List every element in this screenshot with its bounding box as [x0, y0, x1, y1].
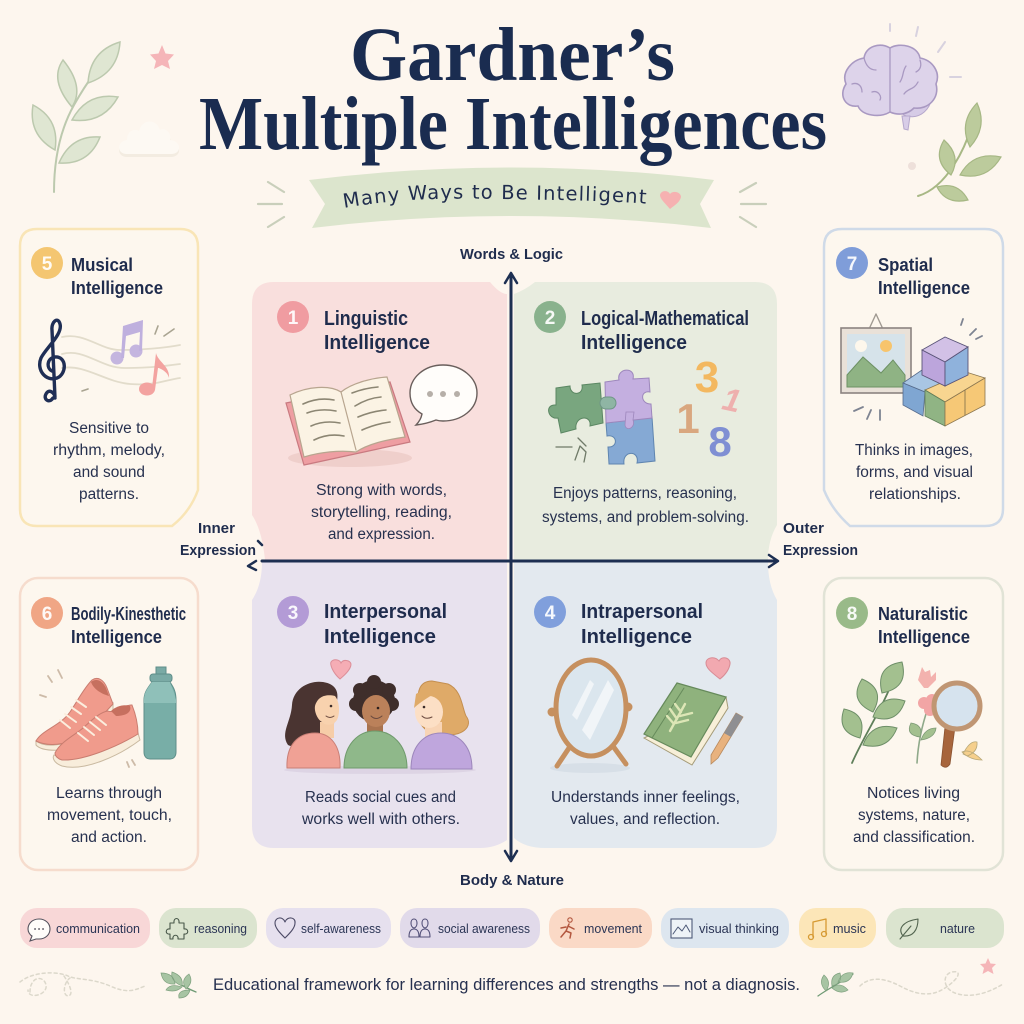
icon: puzzle pieces and numbers: 8 [708, 418, 732, 465]
pill: visual thinking: visual thinking [699, 922, 779, 936]
description: relationships. [869, 486, 961, 503]
panel: Intrapersonal quadrant [514, 562, 777, 848]
icon: clef and notes [40, 320, 180, 401]
description [551, 789, 740, 828]
icon: plant, flower and magnifier [842, 662, 982, 767]
decoration: star [150, 45, 174, 69]
heading: Intelligence [71, 626, 162, 647]
decoration: right sprig [908, 103, 1001, 201]
pill: communication [20, 908, 150, 948]
pill: social awareness: social awareness [438, 922, 530, 936]
heading: Intelligence [324, 626, 436, 648]
footer decoration: left dashed doodle and leaf [20, 972, 196, 998]
title: Gardner’s [350, 13, 675, 97]
icon: open book and speech bubble [286, 365, 477, 467]
heading: Musical [71, 254, 133, 275]
legend pills [20, 908, 1004, 948]
pill: self-awareness: self-awareness [301, 922, 381, 936]
heading: Intelligence [581, 626, 692, 648]
description: Strong with words, [316, 482, 447, 499]
heading: Intelligence [878, 626, 970, 647]
pill: reasoning [159, 908, 257, 948]
badge 6 [31, 597, 63, 629]
axis label: Body & Nature: Body & Nature [460, 872, 564, 889]
description: Enjoys patterns, reasoning, [553, 485, 737, 502]
description: Reads social cues and [305, 789, 456, 806]
panel: Spatial card [824, 229, 1003, 526]
footer note: Educational framework for learning differences and strengths — not a diagnosis. [213, 976, 800, 994]
heading: Intelligence [71, 277, 163, 298]
badge 2: 2 [545, 308, 555, 329]
pill: reasoning: reasoning [194, 922, 247, 936]
panel: Interpersonal quadrant [252, 562, 507, 848]
description: movement, touch, [47, 807, 172, 824]
badge 4: 4 [545, 603, 556, 624]
panel: Musical card [20, 229, 198, 526]
axis label: Inner Expression: Expression [180, 542, 256, 559]
description: Thinks in images, [855, 442, 973, 459]
description: forms, and visual [856, 464, 973, 481]
icon: puzzle pieces and numbers [549, 353, 744, 465]
axis label: Outer Expression [783, 520, 858, 559]
description [311, 482, 452, 543]
heading: Spatial [878, 254, 933, 275]
heading: Interpersonal [324, 601, 447, 623]
description [53, 420, 165, 503]
decoration: left sprig [32, 42, 120, 192]
description: and sound [73, 464, 145, 481]
description [542, 485, 749, 526]
description: Sensitive to [69, 420, 149, 437]
description: values, and reflection. [570, 811, 720, 828]
description: systems, nature, [858, 807, 970, 824]
heading: Intelligence [324, 332, 430, 354]
icon: sneakers and bottle [36, 667, 176, 767]
pill: visual thinking [661, 908, 789, 948]
axis label: Inner Expression [180, 520, 256, 559]
pill: self-awareness [266, 908, 391, 948]
panel: Naturalistic card [824, 578, 1003, 870]
description [47, 785, 172, 846]
axes with arrows [248, 273, 778, 861]
heading [71, 254, 163, 298]
badge 1: 1 [288, 308, 299, 329]
heading [878, 254, 970, 298]
badge 8: 8 [847, 604, 857, 625]
description: and expression. [328, 526, 435, 543]
icon: framed picture and cubes [841, 314, 985, 426]
decoration: cloud [119, 121, 179, 157]
badge 4 [534, 596, 566, 628]
pill: movement [549, 908, 652, 948]
description: Learns through [56, 785, 162, 802]
description [853, 785, 975, 846]
pill: nature [886, 908, 1004, 948]
badge 3: 3 [288, 603, 298, 624]
heading [878, 603, 970, 647]
badge 3 [277, 596, 309, 628]
axis label: Outer Expression: Expression [783, 542, 858, 559]
badge 7: 7 [847, 254, 857, 275]
badge 7 [836, 247, 868, 279]
panel: Bodily-Kinesthetic card [20, 578, 198, 870]
panel: Logical-Mathematical quadrant [514, 282, 777, 560]
icon: mirror, notebook and pen [548, 658, 743, 773]
pill: movement: movement [584, 922, 643, 936]
subtitle ribbon: Many Ways to Be Intelligent [344, 184, 646, 208]
title [199, 13, 827, 166]
pill: music: music [833, 922, 866, 936]
pill: communication: communication [56, 922, 140, 936]
subtitle ribbon [257, 168, 767, 228]
description: and classification. [853, 829, 975, 846]
description: rhythm, melody, [53, 442, 165, 459]
description: systems, and problem-solving. [542, 509, 749, 526]
heading: Bodily-Kinesthetic [71, 603, 186, 624]
description [301, 789, 460, 828]
heading [581, 308, 749, 354]
axis label: Inner Expression: Inner [198, 520, 235, 537]
panel: Linguistic quadrant [252, 282, 507, 560]
description: works well with others. [301, 811, 460, 828]
icon: brain [843, 24, 961, 130]
description: patterns. [79, 486, 139, 503]
axis label: Outer Expression: Outer [783, 520, 824, 537]
heading: Intrapersonal [581, 601, 703, 623]
pill: music [799, 908, 876, 948]
badge 5: 5 [42, 254, 53, 275]
description: and action. [71, 829, 147, 846]
heading [71, 603, 186, 647]
axis label: Words & Logic: Words & Logic [460, 246, 563, 263]
title: Multiple Intelligences [199, 82, 827, 166]
badge 1 [277, 301, 309, 333]
pill: social awareness [400, 908, 540, 948]
icon: puzzle pieces and numbers: 3 [695, 353, 719, 402]
badge 6: 6 [42, 604, 52, 625]
heading [324, 308, 430, 354]
badge 2 [534, 301, 566, 333]
heading: Intelligence [878, 277, 970, 298]
badge 5 [31, 247, 63, 279]
description: Understands inner feelings, [551, 789, 740, 806]
heading: Logical-Mathematical [581, 308, 749, 330]
heading: Linguistic [324, 308, 408, 330]
icon: puzzle pieces and numbers: 1 [719, 381, 744, 419]
description [855, 442, 973, 503]
description: Notices living [867, 785, 960, 802]
footer decoration: right leaf, dashed doodle and star [818, 958, 1003, 996]
heading [324, 601, 447, 648]
heading: Naturalistic [878, 603, 968, 624]
icon: three people talking [284, 660, 476, 774]
heading [581, 601, 703, 648]
icon: puzzle pieces and numbers: 1 [676, 395, 700, 442]
pill: nature: nature [940, 922, 975, 936]
heading: Intelligence [581, 332, 687, 354]
badge 8 [836, 597, 868, 629]
description: storytelling, reading, [311, 504, 452, 521]
